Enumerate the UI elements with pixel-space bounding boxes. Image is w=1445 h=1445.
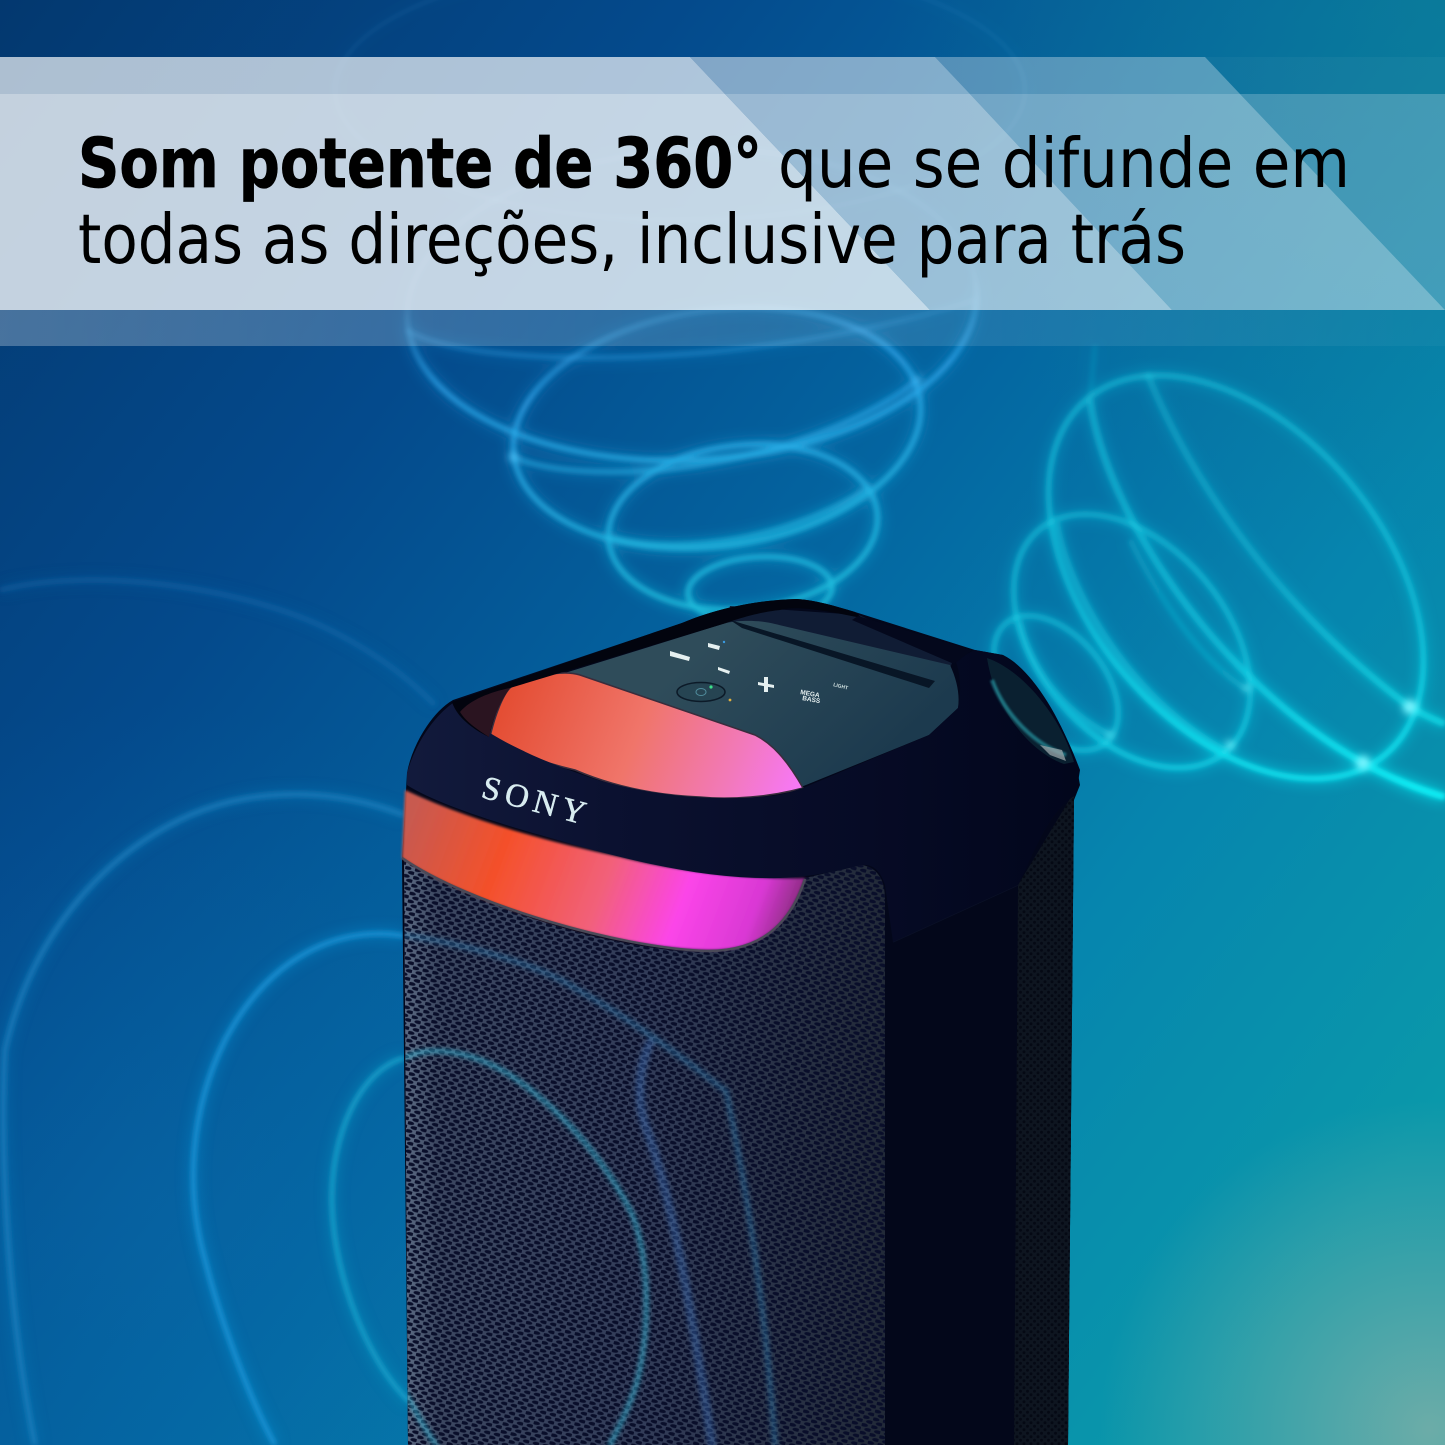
banner main panel [0, 94, 1445, 310]
upper light panel [490, 673, 803, 798]
sound waves: top ripples [403, 296, 980, 618]
SONY logo: SONY [478, 770, 590, 832]
control: play, bluetooth, volume icons [670, 641, 774, 701]
headline line 1 bold: Som potente de 360° [78, 124, 762, 204]
rim opening [460, 688, 510, 737]
lens highlight [1040, 745, 1066, 761]
sound waves: right ripples [986, 346, 1445, 806]
headline [78, 124, 1350, 280]
rear slot [730, 620, 935, 688]
back rim [452, 599, 862, 737]
wave arcs on the grille [404, 935, 775, 1445]
lower light panel [402, 790, 805, 950]
front grille [400, 850, 890, 1445]
banner bottom strip [0, 310, 1445, 346]
speaker body silhouette [402, 599, 1080, 1445]
control: power button [677, 682, 725, 702]
lower light rim [402, 858, 805, 951]
headline line 1 regular: que se difunde em [778, 124, 1350, 204]
wave intersection glints [509, 377, 1417, 770]
lens reflection arc [992, 680, 1066, 755]
rear cavity [726, 606, 954, 668]
side panel seam [893, 885, 1018, 942]
side grille mesh [1014, 792, 1074, 1445]
headline line 2: todas as direções, inclusive para trás [78, 200, 1186, 280]
side grille [1014, 792, 1074, 1445]
control: bass label: BASS [802, 695, 821, 705]
side lens [987, 658, 1074, 764]
control: light label: LIGHT [833, 682, 849, 692]
banner top strip [0, 57, 1445, 94]
front band [407, 650, 1080, 942]
rear rim bar [852, 616, 972, 664]
sound waves: left ripples [0, 580, 435, 1445]
banner [0, 57, 1445, 346]
control: mega label: MEGA [800, 689, 820, 699]
top control panel [510, 621, 959, 790]
speaker [400, 599, 1080, 1445]
